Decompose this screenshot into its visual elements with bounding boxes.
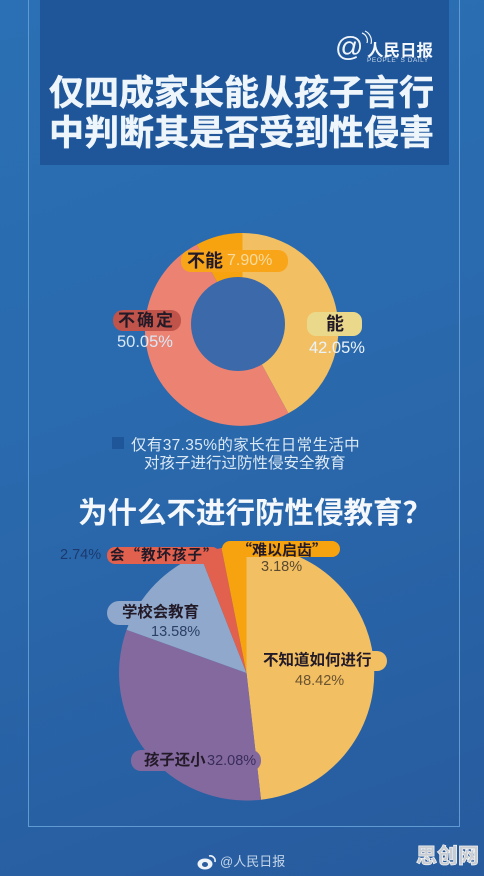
slice: 孩子还小 32.08%: [119, 630, 261, 801]
value: 13.58%: 13.58%: [151, 624, 200, 640]
icon: at sign: @: [335, 31, 363, 62]
label: 学校会教育: 学校会教育: [122, 604, 199, 621]
label: 孩子还小: 32.08%: [207, 753, 256, 769]
legend swatch: [112, 437, 124, 449]
slice: 学校会教育 13.58%: [127, 554, 246, 673]
label: 会教坏孩子: 会“教坏孩子”: [110, 544, 218, 565]
label: 孩子还小: [131, 750, 261, 771]
slice: 难以启齿 3.18%: [222, 546, 246, 673]
label: 不确定: 不确定: [118, 311, 175, 330]
label: 能: 能: [326, 314, 344, 334]
title: 中判断其是否受到性侵害: [49, 114, 434, 152]
label: 孩子还小: 孩子还小: [144, 752, 206, 769]
logo english: PEOPLE' S DAILY: [367, 57, 429, 64]
label: 难以启齿: “难以启齿”: [237, 539, 327, 560]
value: 2.74%: 2.74%: [60, 547, 101, 563]
label: 学校会教育: [107, 601, 202, 625]
legend line 1: 仅有37.35%的家长在日常生活中: [131, 437, 360, 454]
label: 不能: 7.90%: [227, 252, 272, 269]
weibo handle: @人民日报: [220, 854, 285, 869]
icon: signal arcs: [362, 30, 372, 44]
logo: People's Daily: [335, 30, 433, 64]
watermark: 思创网: [416, 845, 479, 868]
value: 48.42%: 48.42%: [295, 673, 344, 689]
weibo credit: [198, 854, 285, 870]
pie chart: [119, 545, 374, 801]
label: 难以启齿: [222, 541, 340, 557]
value: 50.05%: 50.05%: [117, 333, 173, 351]
heading: 为什么不进行防性侵教育？: [78, 497, 432, 530]
logo name: 人民日报: [367, 42, 433, 60]
value: 3.18%: 3.18%: [261, 559, 302, 575]
title: 仅四成家长能从孩子言行: [49, 74, 434, 113]
title: [49, 74, 434, 152]
slice: 会教坏孩子 2.74%: [200, 548, 246, 673]
slice: 能 42.05%: [242, 233, 338, 413]
slice: 不知道如何进行 48.42%: [246, 545, 374, 800]
slice: 不确定 50.05%: [145, 245, 288, 426]
legend line 2: 对孩子进行过防性侵安全教育: [144, 455, 346, 472]
slice: 不能 7.90%: [197, 233, 242, 329]
label: 能: [307, 312, 362, 336]
header panel: [40, 0, 449, 165]
legend note: [112, 436, 360, 472]
value: 42.05%: 42.05%: [309, 339, 365, 357]
label: 不能: 不能: [187, 251, 223, 271]
donut hole: [191, 277, 285, 371]
label: 不知道如何进行: 不知道如何进行: [263, 652, 372, 669]
icon: weibo: [198, 855, 216, 870]
label: 不能: [181, 250, 288, 272]
